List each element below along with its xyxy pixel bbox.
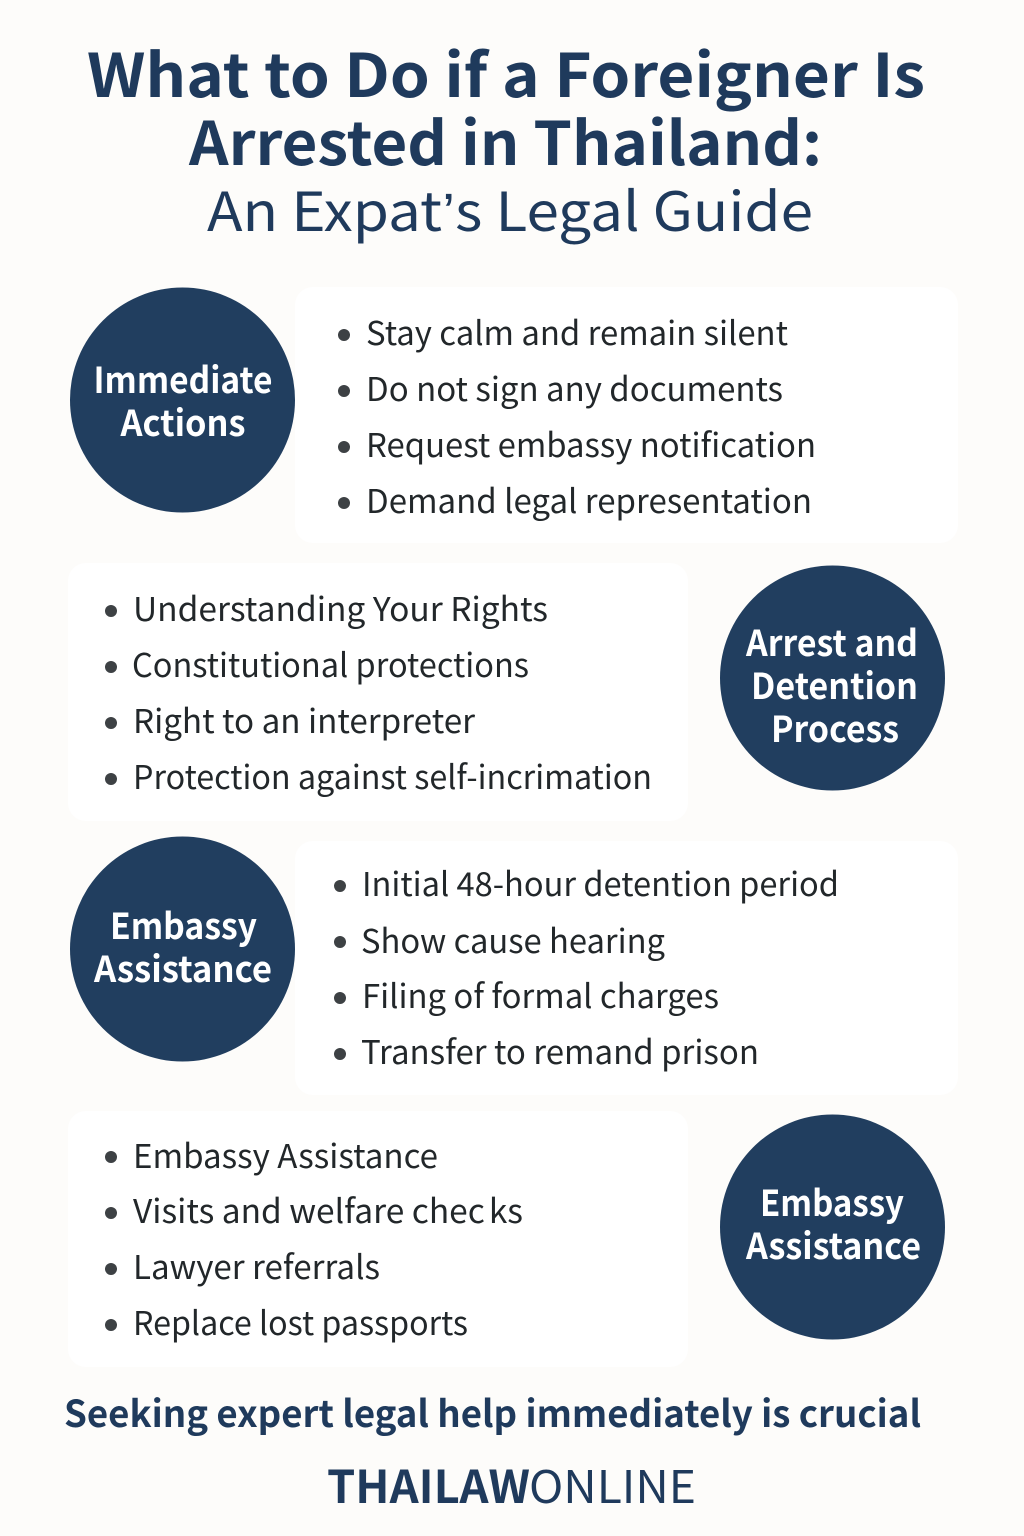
bullet list: rights — [105, 583, 652, 799]
bullet list: detention steps: Show cause hearing — [361, 915, 665, 963]
title — [87, 28, 925, 247]
badge: Arrest and Detention Process: Detention — [751, 658, 918, 710]
panel: embassy assistance, detention steps — [70, 836, 958, 1095]
panel: arrest and detention process — [68, 563, 945, 821]
logo: Thailawonline wordmark: THAILAW — [327, 1451, 530, 1516]
badge: Immediate Actions — [70, 288, 295, 512]
badge: Arrest and Detention Process — [720, 566, 945, 790]
title: Arrested in Thailand: — [188, 96, 822, 183]
bullet list: immediate actions: Request embassy notification — [366, 419, 816, 467]
title: What to Do if a Foreigner Is — [87, 28, 925, 115]
badge: Embassy Assistance: Assistance — [93, 941, 272, 993]
bullet list: embassy services: Embassy Assistance — [133, 1130, 438, 1178]
badge: Arrest and Detention Process: Arrest and — [745, 615, 918, 667]
panel card: detention steps list — [295, 841, 958, 1095]
badge: Embassy Assistance — [70, 836, 295, 1062]
bullet list: embassy services — [105, 1130, 523, 1345]
bullet list: detention steps: Filing of formal charges — [362, 970, 719, 1018]
panel card: embassy services list — [68, 1111, 688, 1367]
badge: Immediate Actions: Immediate — [94, 352, 272, 404]
bullet list: embassy services: Replace lost passports — [133, 1297, 468, 1345]
panel card: immediate actions list — [295, 287, 958, 543]
bullet list: immediate actions: Do not sign any documents — [366, 363, 783, 411]
logo: Thailawonline wordmark: ONLINE — [529, 1451, 696, 1516]
bullet list: detention steps — [334, 858, 839, 1074]
panel: immediate actions — [70, 287, 958, 543]
bullet list: immediate actions: Demand legal representation — [366, 475, 812, 523]
bullet list: rights: Understanding Your Rights — [133, 583, 548, 631]
title: An Expat ’s Legal Guide — [207, 168, 813, 247]
bullet list: detention steps: Transfer to remand prison — [361, 1026, 759, 1074]
callout: seek legal help: Seeking expert legal help immediately is crucial — [64, 1384, 921, 1438]
panel: embassy assistance, services — [68, 1111, 945, 1367]
badge: Embassy Assistance: Embassy — [760, 1175, 904, 1227]
badge: Embassy Assistance: Embassy — [110, 898, 257, 950]
bullet list: rights: Constitutional protections — [132, 639, 529, 687]
badge: Immediate Actions: Actions — [120, 395, 246, 447]
badge: Arrest and Detention Process: Process — [771, 701, 899, 753]
bullet list: rights: Right to an interpreter — [133, 695, 475, 743]
bullet list: embassy services: Visits and welfare chec ks — [133, 1185, 523, 1233]
badge: Embassy Assistance — [720, 1114, 945, 1340]
bullet list: embassy services: Lawyer referrals — [133, 1241, 380, 1289]
bullet list: immediate actions — [338, 307, 816, 523]
bullet list: rights: Protection against self-incrimation — [133, 751, 652, 799]
bullet list: detention steps: Initial 48-hour detention period — [362, 858, 839, 906]
badge: Embassy Assistance: Assistance — [745, 1218, 921, 1270]
bullet list: immediate actions: Stay calm and remain silent — [366, 307, 788, 355]
logo: Thailawonline wordmark — [327, 1451, 696, 1516]
panel card: rights list — [68, 563, 688, 821]
